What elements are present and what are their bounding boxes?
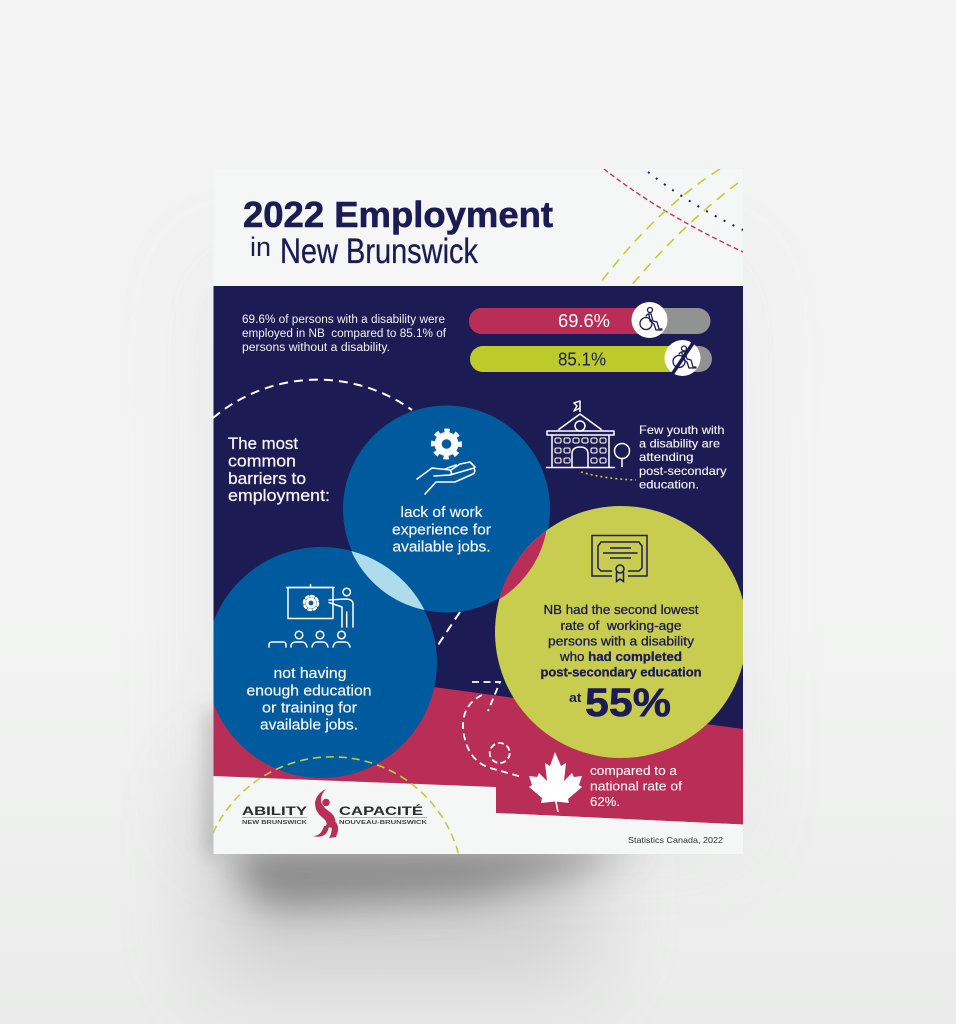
heading: most common barriers [228, 435, 330, 505]
icon: logo figure [309, 789, 338, 838]
overlap highlight [351, 551, 424, 610]
dotted connector under school [581, 472, 636, 480]
text: few youth: Few youth with [639, 423, 724, 437]
text: post-secondary completion: NB had the second lowest [544, 603, 699, 617]
title: in [250, 232, 271, 262]
text: lack of work experience: experience for [392, 522, 491, 538]
poster card [206, 169, 747, 854]
text: compared to national rate: national rate of [590, 778, 682, 794]
text: few youth: a disability are [639, 436, 720, 450]
decorative dashed curve: yellow 1 [598, 169, 720, 286]
panel: navy body [213, 286, 743, 796]
bar: persons with a disability 69.6%: 69.6% [558, 311, 610, 331]
icon: wheelchair [632, 302, 668, 338]
bar: persons without a disability 85.1% [470, 340, 712, 376]
employment comparison text [242, 314, 447, 354]
text: lack of work experience: lack of work [400, 504, 483, 521]
heading: most common barriers: common [228, 452, 296, 470]
text: compared to national rate: compared to a [590, 763, 678, 778]
decorative dotted curve: navy [648, 172, 743, 230]
icon: maple leaf [529, 752, 582, 812]
text: compared to national rate: 62%. [590, 794, 620, 809]
text: post-secondary completion: who had completed [559, 650, 682, 664]
icon: wheelchair crossed out [664, 340, 700, 376]
icon: presentation [269, 584, 353, 647]
bar: persons with a disability 69.6% [469, 302, 710, 338]
employment comparison text: 69.6% of persons with a disability were [242, 314, 445, 326]
text: few youth: education. [639, 478, 699, 492]
logo: ABILITY [242, 806, 307, 818]
text: not enough education: available jobs. [260, 716, 358, 734]
icon: certificate [592, 536, 647, 582]
circle: lack of work experience [343, 406, 550, 612]
text: lack of work experience [392, 504, 491, 556]
text: not enough education: not having [274, 665, 346, 682]
circle: not enough education [206, 547, 437, 778]
text: few youth: post-secondary [639, 464, 727, 478]
dashed swirl arrow [463, 682, 522, 777]
logo: NOUVEAU-BRUNSWICK [339, 820, 427, 826]
decorative dashed curve: yellow 2 [631, 183, 738, 286]
dashed arc bottom left [213, 757, 458, 854]
title: New Brunswick [280, 232, 478, 271]
stat: at 55%: at [569, 691, 582, 705]
text: not enough education: enough education [246, 682, 372, 700]
text: post-secondary completion: persons with a disability [548, 634, 695, 648]
dashed connector below circle [436, 612, 460, 648]
text: few youth [639, 423, 727, 492]
icon: school building [546, 401, 630, 468]
source credit: Statistics Canada, 2022 [628, 835, 723, 845]
icon: gear [431, 428, 462, 460]
bar: persons without a disability 85.1%: 85.1% [558, 350, 606, 370]
text: post-secondary completion: rate of working-age [560, 619, 682, 633]
text: post-secondary completion: post-secondary education [540, 666, 702, 680]
icon: open hand [417, 462, 475, 494]
logo: NEW BRUNSWICK [242, 820, 307, 826]
circle: post-secondary completion 55% [495, 506, 747, 758]
decorative dashed curve: crimson [604, 169, 743, 252]
stat: at 55%: 55% [585, 681, 671, 725]
title [244, 200, 553, 264]
dashed arc top left [213, 380, 412, 418]
heading: most common barriers: The most [228, 435, 298, 453]
text: not enough education [246, 665, 372, 734]
employment comparison text: employed in NB compared to 85.1% of [242, 328, 447, 340]
title: 2022 Employment [243, 194, 553, 235]
text: compared to national rate [590, 766, 682, 806]
panel: white footer corner [214, 776, 742, 824]
logo: CAPACITÉ [339, 805, 423, 818]
overlap wedge [499, 530, 546, 600]
panel: crimson band [214, 687, 743, 824]
employment comparison text: persons without a disability. [242, 342, 390, 354]
heading: most common barriers: barriers to [228, 470, 306, 488]
text: few youth: attending [639, 450, 694, 464]
heading: most common barriers: employment: [228, 487, 330, 505]
stat: at 55% [569, 688, 670, 717]
text: lack of work experience: available jobs. [392, 538, 490, 556]
logo [242, 789, 427, 838]
text: post-secondary completion [540, 603, 702, 680]
text: not enough education: or training for [262, 700, 357, 716]
